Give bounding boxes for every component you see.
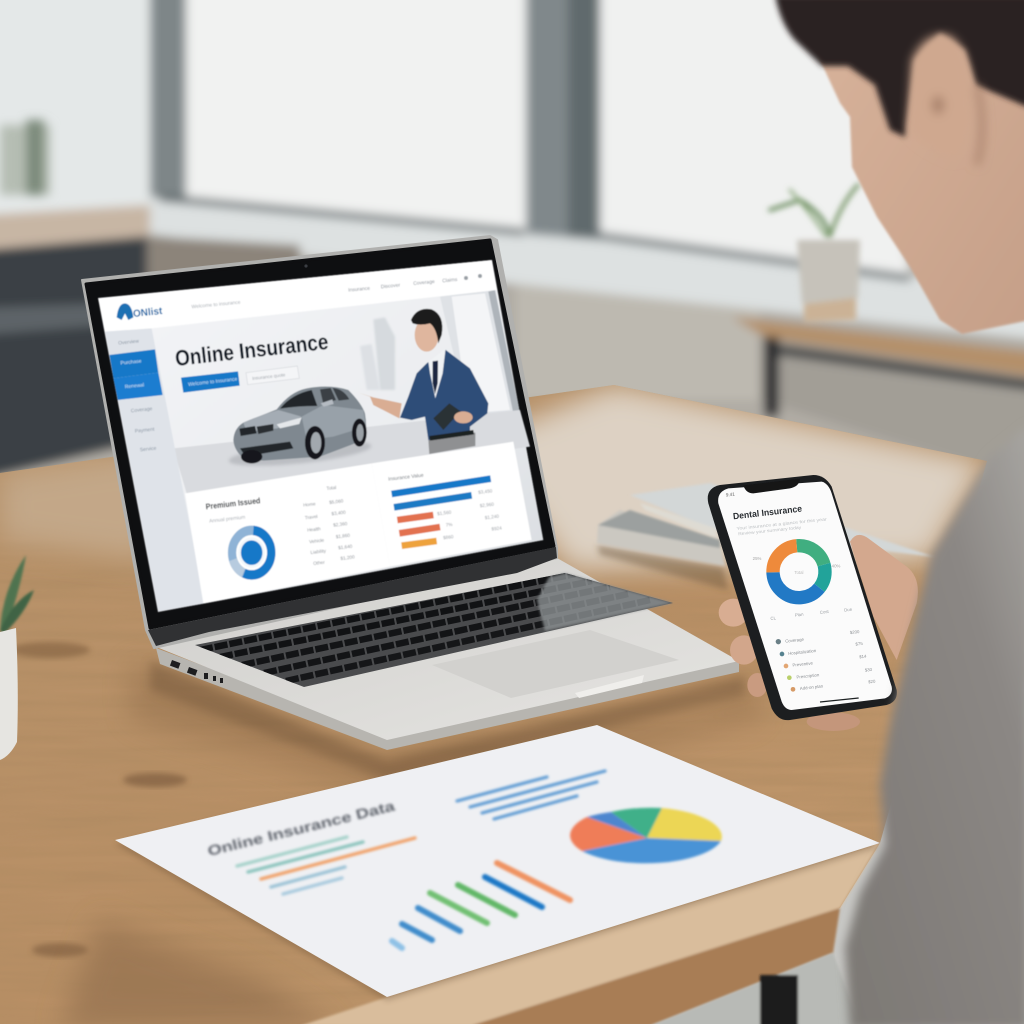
wooden table top bbox=[0, 380, 1024, 1024]
home indicator bbox=[820, 698, 859, 702]
primary button bbox=[181, 371, 240, 393]
horizontal bars bbox=[392, 479, 491, 546]
sidebar: Payment bbox=[135, 427, 155, 435]
header bar bbox=[98, 260, 497, 332]
phone heading: Dental Insurance bbox=[732, 504, 802, 521]
legend table: $1,640 bbox=[338, 544, 353, 550]
hinge band bbox=[148, 547, 557, 646]
header text: Coverage bbox=[413, 279, 435, 287]
header text: Discover bbox=[381, 282, 401, 290]
bar values: $1,240 bbox=[485, 514, 500, 520]
legend table: Travel bbox=[305, 514, 318, 520]
legend table: Total bbox=[326, 485, 337, 491]
secondary button: Insurance quote bbox=[252, 372, 286, 381]
bar values: $3,450 bbox=[478, 488, 493, 495]
hero title: Online Insurance bbox=[174, 329, 330, 371]
laptop bbox=[82, 236, 745, 780]
right bar chart card bbox=[372, 442, 532, 567]
back fingers of hand bbox=[719, 535, 918, 731]
left chart card: Annual premium bbox=[209, 515, 246, 525]
legend table: Liability bbox=[310, 548, 327, 555]
legend table: Home bbox=[303, 501, 316, 508]
sidebar active items bbox=[109, 349, 158, 378]
car illustration bbox=[228, 387, 372, 471]
stack of notebooks behind the phone bbox=[597, 483, 935, 590]
header text bbox=[191, 277, 458, 310]
pie chart bbox=[570, 808, 722, 863]
laptop base bbox=[154, 558, 739, 750]
phone donut chart bbox=[753, 543, 840, 600]
ear bbox=[908, 35, 982, 165]
person in foreground bbox=[775, 0, 1024, 1024]
header icons bbox=[464, 274, 482, 280]
smartphone with hand bbox=[708, 475, 918, 731]
legend table: Vehicle bbox=[309, 538, 325, 544]
phone donut chart: Total bbox=[794, 570, 804, 575]
phone body bbox=[708, 475, 897, 720]
secondary button bbox=[246, 366, 299, 385]
phone metric icons: Due bbox=[844, 607, 853, 613]
printed report on table bbox=[115, 725, 880, 1001]
sidebar: Renewal bbox=[125, 382, 145, 390]
phone list rows: Coverage bbox=[785, 637, 805, 644]
face and neck bbox=[815, 0, 1024, 334]
phone list rows: $14 bbox=[859, 654, 867, 659]
phone metric icons: CL bbox=[770, 615, 777, 621]
phone list rows: Add-on plan bbox=[800, 684, 824, 691]
bar values: $2,960 bbox=[480, 502, 495, 508]
phone list rows: $75 bbox=[855, 641, 864, 647]
logo bbox=[117, 303, 164, 320]
blue text lines bbox=[457, 771, 605, 819]
trackpad bbox=[432, 630, 679, 698]
phone list rows: $200 bbox=[850, 629, 860, 635]
sidebar: Service bbox=[140, 446, 157, 453]
phone subheading: Review your summary today bbox=[738, 525, 802, 536]
bar values: $860 bbox=[443, 534, 454, 540]
header text: Claims bbox=[442, 277, 458, 284]
sidebar: Overview bbox=[118, 338, 140, 347]
legend table bbox=[303, 485, 355, 566]
webcam bbox=[304, 264, 308, 268]
status text: 9:41 bbox=[726, 492, 736, 498]
keyboard bbox=[195, 573, 673, 687]
legend table: Health bbox=[307, 526, 321, 533]
notch bbox=[743, 479, 800, 493]
legend table: $5,060 bbox=[329, 498, 344, 505]
hair bbox=[775, 0, 1024, 137]
report title: Online Insurance Data bbox=[206, 798, 396, 859]
phone screen bbox=[718, 482, 892, 710]
left chart card bbox=[185, 463, 390, 603]
header text: Insurance bbox=[348, 286, 371, 294]
header text: Welcome to insurance bbox=[191, 300, 241, 310]
bar values bbox=[437, 488, 502, 540]
laptop shadow on table bbox=[150, 660, 745, 780]
bar values: $924 bbox=[491, 525, 502, 532]
presenter figure bbox=[358, 309, 488, 454]
sidebar bbox=[105, 328, 205, 612]
skyline and office window bbox=[360, 290, 520, 417]
logo: ONlist bbox=[132, 306, 164, 320]
phone list rows: Prescription bbox=[796, 672, 820, 680]
legend table: Other bbox=[313, 560, 325, 566]
left chart card: Premium Issued bbox=[205, 496, 261, 511]
laptop lid bbox=[82, 236, 557, 648]
sidebar: Coverage bbox=[131, 406, 153, 414]
legend table: $1,200 bbox=[340, 554, 355, 561]
bar values: $1,560 bbox=[437, 510, 452, 516]
phone list rows: Hospitalization bbox=[788, 648, 817, 656]
phone list rows: $20 bbox=[868, 679, 876, 684]
phone metric icons: Cost bbox=[820, 609, 830, 615]
legend table: $3,400 bbox=[331, 510, 346, 516]
diagonal column bars bbox=[392, 863, 570, 948]
laptop screen bbox=[98, 260, 543, 612]
right bar chart card: Insurance Value bbox=[388, 473, 424, 483]
floor bbox=[173, 410, 530, 493]
floor and table leg under the table bbox=[650, 953, 860, 1024]
primary button: Welcome to Insurance bbox=[188, 376, 238, 388]
blurred potted plant on the side desk bbox=[770, 185, 860, 322]
phone list rows bbox=[776, 629, 876, 692]
phone donut chart: 40% bbox=[832, 563, 840, 568]
legend table: $1,860 bbox=[336, 533, 351, 539]
hero background bbox=[152, 290, 543, 603]
blue donut chart bbox=[226, 523, 278, 582]
phone subheading: Your insurance at a glance for this year bbox=[736, 516, 828, 531]
front notch bbox=[575, 675, 644, 698]
side ports bbox=[170, 660, 223, 683]
phone subheading bbox=[736, 516, 828, 536]
phone list rows: Preventive bbox=[792, 660, 814, 668]
sidebar: Purchase bbox=[120, 358, 142, 367]
phone donut chart: 25% bbox=[753, 556, 761, 561]
background room: windows, wall and cabinet bbox=[0, 0, 1024, 680]
table front edge bbox=[300, 843, 880, 1024]
potted plant at left edge bbox=[0, 555, 34, 760]
horizontal bars bbox=[237, 837, 415, 894]
legend table: $2,360 bbox=[333, 521, 348, 528]
phone list rows: $30 bbox=[865, 667, 873, 673]
bar values: 7% bbox=[446, 522, 453, 528]
sweater bbox=[845, 425, 1024, 1024]
phone metric icons: Plan bbox=[795, 612, 804, 618]
blurred plant on the left windowsill bbox=[0, 120, 50, 195]
phone metric icons bbox=[770, 607, 853, 621]
